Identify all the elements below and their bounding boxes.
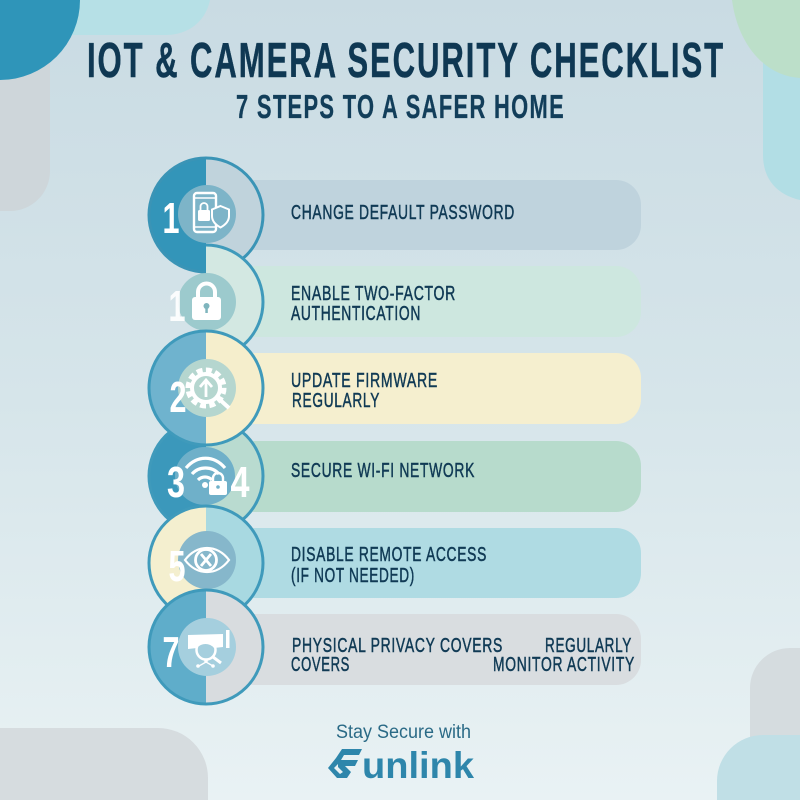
- logo wordmark: unlink: [362, 745, 474, 786]
- step 5 label: (IF NOT NEEDED): [291, 565, 415, 587]
- step 4 label: SECURE WI-FI NETWORK: [291, 460, 475, 482]
- icon: crossed-out eye: [185, 548, 229, 572]
- footer tagline: Stay Secure with: [336, 722, 471, 743]
- step 5 medallion: 5: [168, 542, 186, 591]
- icon: padlock: [192, 284, 221, 320]
- step 2 medallion: [168, 245, 263, 359]
- step 1 medallion: 1: [162, 194, 180, 243]
- step 6 label: COVERS: [291, 654, 350, 676]
- step 2 label: AUTHENTICATION: [291, 303, 421, 325]
- step 5 pill: [230, 528, 641, 598]
- step 4 medallion: 4: [230, 458, 250, 507]
- step 6 pill: [230, 614, 641, 685]
- step 4 medallion: 3: [167, 458, 185, 507]
- icon: gear with arrow and magnifier: [188, 370, 229, 408]
- step 3 label: REGULARLY: [292, 390, 380, 412]
- step 2 pill: [230, 266, 641, 337]
- step 6 label: PHYSICAL PRIVACY COVERS: [292, 635, 503, 657]
- icon: logo mark: [328, 749, 362, 778]
- step 6 medallion: 7: [162, 628, 180, 677]
- step 4 medallion: [148, 432, 264, 520]
- step 6 label: MONITOR ACTIVITY: [493, 654, 635, 676]
- step 1 medallion: [149, 158, 263, 272]
- step 2 label: [291, 283, 456, 325]
- icon: wifi with lock: [186, 458, 227, 495]
- step 5 medallion: [149, 506, 263, 620]
- step 3 pill: [230, 353, 641, 424]
- step 5 label: [291, 544, 487, 587]
- step 3 label: [291, 370, 438, 412]
- step 2 medallion: 1: [168, 282, 186, 331]
- step 6 label: [291, 635, 635, 676]
- step 1 label: CHANGE DEFAULT PASSWORD: [291, 202, 515, 224]
- logo: Funlink: [328, 745, 474, 786]
- icon: phone with lock and shield: [194, 193, 229, 232]
- step 3 medallion: 2: [170, 373, 186, 422]
- step 6 label: REGULARLY: [545, 635, 632, 657]
- step 4 pill: [230, 441, 641, 512]
- subtitle: 7 STEPS TO A SAFER HOME: [236, 88, 565, 125]
- step 3 medallion: [149, 331, 263, 445]
- icon: camera with magnifier and nodes: [188, 630, 230, 668]
- step 3 label: UPDATE FIRMWARE: [291, 370, 438, 392]
- step 5 label: DISABLE REMOTE ACCESS: [291, 544, 487, 566]
- step 1 pill: [230, 180, 641, 250]
- step 6 medallion: [149, 590, 263, 704]
- step 2 label: ENABLE TWO-FACTOR: [291, 283, 456, 305]
